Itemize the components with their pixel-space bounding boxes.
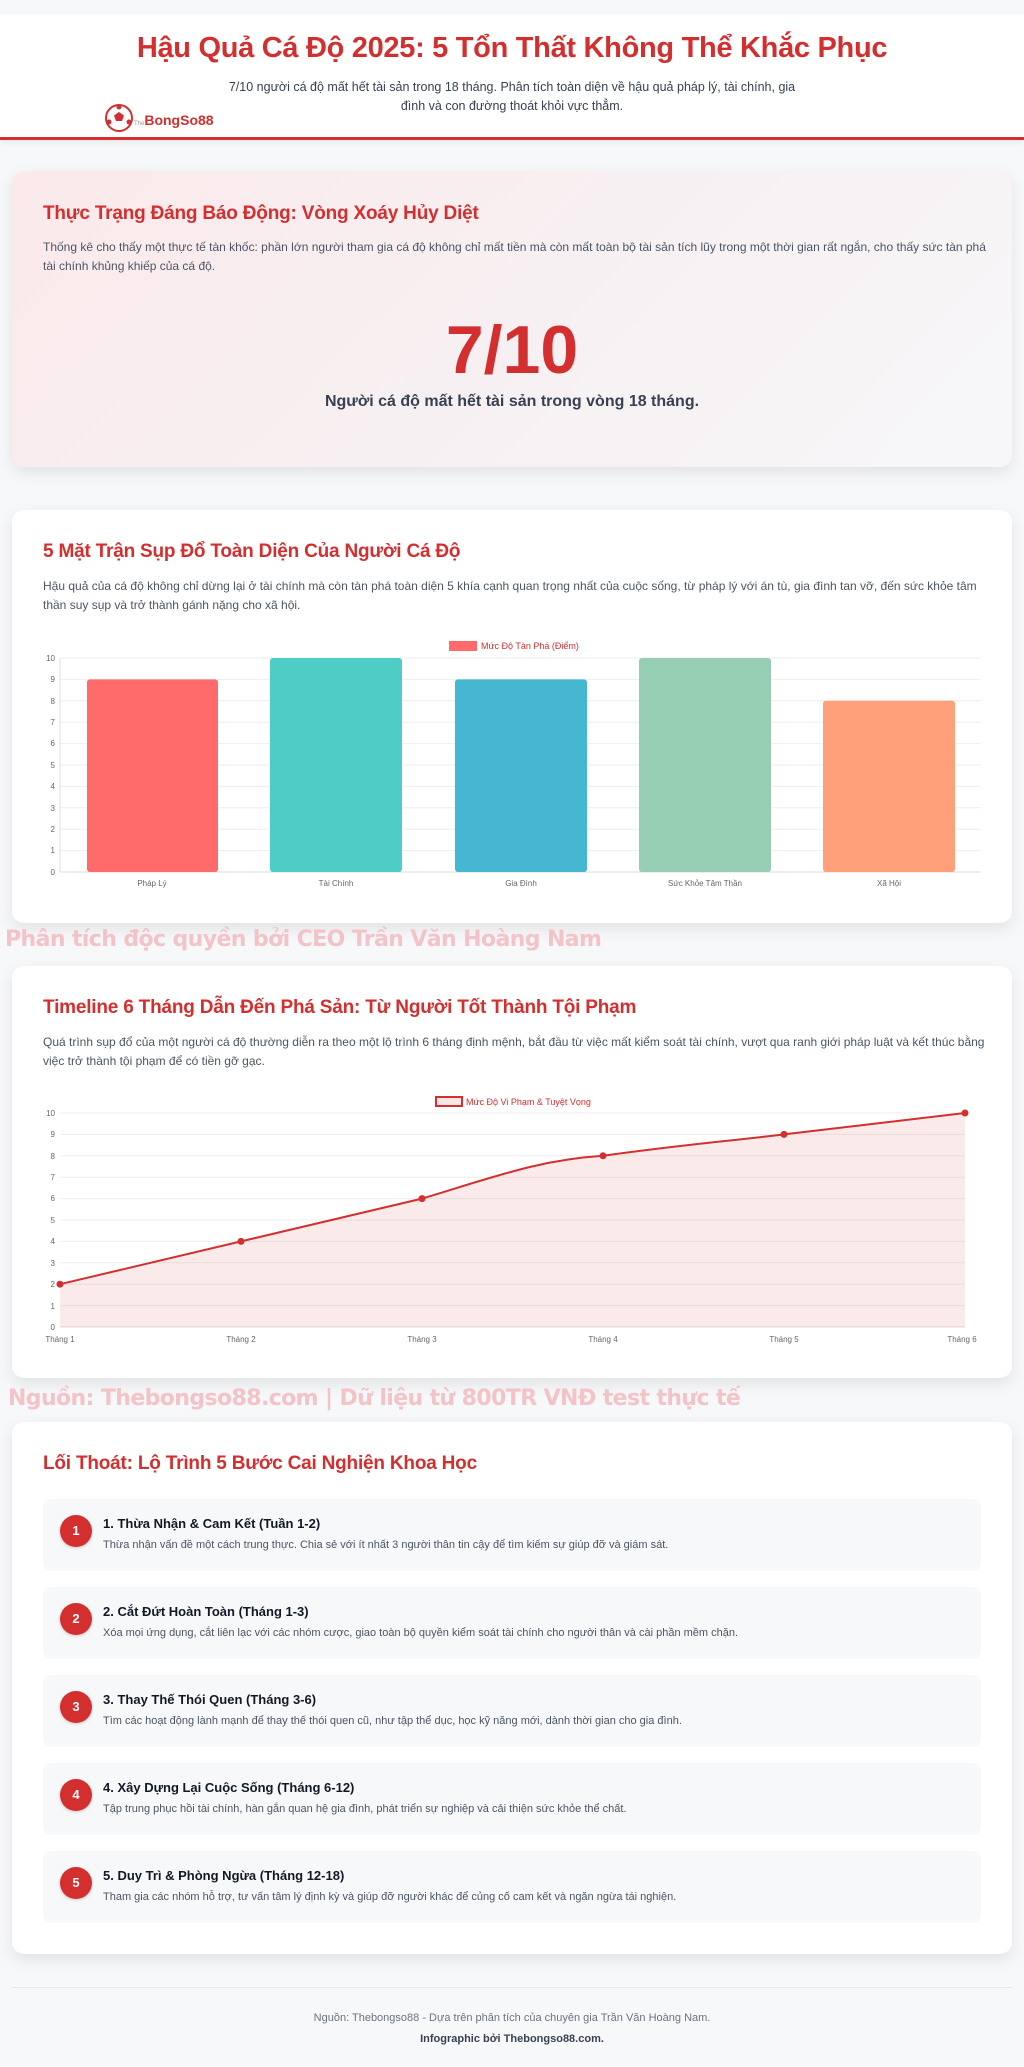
step 4 bbox=[43, 1763, 981, 1835]
stat caption: Người cá độ mất hết tài sản trong vòng 18 tháng. bbox=[325, 393, 699, 410]
heading: Lối Thoát: Lộ Trình 5 Bước Cai Nghiện Khoa Học bbox=[43, 1453, 477, 1474]
line chart bbox=[45, 1096, 977, 1344]
line chart: 2 bbox=[51, 1280, 56, 1289]
bar chart: 3 bbox=[51, 804, 56, 813]
line chart: 6 bbox=[51, 1194, 56, 1203]
step 3: 3 bbox=[72, 1699, 80, 1714]
heading: Timeline 6 Tháng Dẫn Đến Phá Sản: Từ Người Tốt Thành Tội Phạm bbox=[43, 997, 636, 1018]
bar chart: 7 bbox=[51, 718, 56, 727]
step 4: Tập trung phục hồi tài chính, hàn gắn quan hệ gia đình, phát triển sự nghiệp và cải thiện sức khỏe thể chất. bbox=[103, 1803, 627, 1815]
bar chart: 10 bbox=[46, 654, 56, 663]
footer: Nguồn: Thebongso88 - Dựa trên phân tích của chuyên gia Trần Văn Hoàng Nam. bbox=[314, 2012, 710, 2024]
line chart: 5 bbox=[51, 1216, 56, 1225]
line chart: Tháng 3 bbox=[407, 1335, 437, 1344]
footer: Infographic bởi Thebongso88.com. bbox=[420, 2033, 604, 2045]
step 4: 4 bbox=[72, 1787, 80, 1802]
bars bbox=[87, 658, 955, 872]
step 1 bbox=[43, 1499, 981, 1571]
logo bbox=[105, 104, 214, 132]
line chart: Tháng 4 bbox=[588, 1335, 618, 1344]
step 1: 1. Thừa Nhận & Cam Kết (Tuần 1-2) bbox=[103, 1516, 320, 1531]
bar chart: 1 bbox=[51, 846, 56, 855]
panel: timeline bbox=[12, 966, 1012, 1378]
bar chart: Tài Chính bbox=[319, 879, 353, 888]
step 4: 4. Xây Dựng Lại Cuộc Sống (Tháng 6-12) bbox=[103, 1780, 354, 1795]
paragraph: Quá trình sụp đổ của một người cá độ thường diễn ra theo một lộ trình 6 tháng định mệnh, bắt đầu từ việc mất kiểm soát tài chính, vượt qua ranh giới pháp luật và kết thúc bằng việc trở thành tội phạm để có tiền gỡ gạc. bbox=[43, 1035, 984, 1068]
bar chart: Xã Hội bbox=[877, 879, 901, 888]
line chart: Tháng 5 bbox=[769, 1335, 799, 1344]
step 2: 2. Cắt Đứt Hoàn Toàn (Tháng 1-3) bbox=[103, 1604, 309, 1619]
line chart: 10 bbox=[46, 1109, 56, 1118]
line chart: 7 bbox=[51, 1173, 56, 1182]
bar chart: 6 bbox=[51, 739, 56, 748]
paragraph: Hậu quả của cá độ không chỉ dừng lại ở tài chính mà còn tàn phá toàn diện 5 khía cạnh quan trọng nhất của cuộc sống, từ pháp lý với án tù, gia đình tan vỡ, đến sức khỏe tâm thần suy sụp và trở thành gánh nặng cho xã hội. bbox=[43, 579, 977, 612]
step 3 bbox=[43, 1675, 981, 1747]
line chart: 9 bbox=[51, 1130, 56, 1139]
panel: 5 fronts bbox=[12, 510, 1012, 923]
bar chart: 0 bbox=[51, 868, 56, 877]
line chart: Tháng 2 bbox=[226, 1335, 256, 1344]
bar chart: 5 bbox=[51, 761, 56, 770]
logo: TheBongSo88 bbox=[134, 112, 214, 128]
bar chart: Pháp Lý bbox=[137, 879, 167, 888]
paragraph: Thống kê cho thấy một thực tế tàn khốc: phần lớn người tham gia cá độ không chỉ mất tiền mà còn mất toàn bộ tài sản tích lũy trong một thời gian rất ngắn, cho thấy sức tàn phá tài chính khủng khiếp của cá độ. bbox=[43, 240, 986, 273]
step 2 bbox=[43, 1587, 981, 1659]
step 3: Tìm các hoạt động lành mạnh để thay thế thói quen cũ, như tập thể dục, học kỹ năng mới, dành thời gian cho gia đình. bbox=[103, 1715, 682, 1727]
line chart: 1 bbox=[51, 1302, 56, 1311]
panel: alarming reality bbox=[12, 171, 1012, 467]
bar chart: 9 bbox=[51, 675, 56, 684]
step 5: 5 bbox=[72, 1875, 80, 1890]
bar chart: 8 bbox=[51, 697, 56, 706]
step 5 bbox=[43, 1851, 981, 1923]
title: Hậu Quả Cá Độ 2025: 5 Tổn Thất Không Thể Khắc Phục bbox=[137, 32, 887, 64]
heading: 5 Mặt Trận Sụp Đổ Toàn Diện Của Người Cá Độ bbox=[43, 541, 460, 562]
bar chart bbox=[46, 641, 981, 888]
watermark: CEO: Phân tích độc quyền bởi CEO Trần Văn Hoàng Nam bbox=[5, 927, 601, 952]
step 5: 5. Duy Trì & Phòng Ngừa (Tháng 12-18) bbox=[103, 1868, 344, 1883]
step 1: 1 bbox=[72, 1523, 80, 1538]
step 2: Xóa mọi ứng dụng, cắt liên lạc với các nhóm cược, giao toàn bộ quyền kiểm soát tài chính cho người thân và cài phần mềm chặn. bbox=[103, 1627, 738, 1639]
line chart: 3 bbox=[51, 1259, 56, 1268]
watermark: source: Nguồn: Thebongso88.com | Dữ liệu từ 800TR VNĐ test thực tế bbox=[8, 1386, 740, 1411]
heading: Thực Trạng Đáng Báo Động: Vòng Xoáy Hủy Diệt bbox=[43, 203, 479, 224]
panel: recovery steps bbox=[12, 1422, 1012, 1954]
line chart: 4 bbox=[51, 1237, 56, 1246]
bar chart: Sức Khỏe Tâm Thần bbox=[668, 879, 742, 888]
big stat: 7/10 bbox=[446, 312, 578, 388]
line chart: 8 bbox=[51, 1152, 56, 1161]
bar chart: 2 bbox=[51, 825, 56, 834]
line chart: Tháng 1 bbox=[45, 1335, 75, 1344]
legend: Mức Độ Vi Phạm & Tuyệt Vọng bbox=[466, 1097, 591, 1107]
step 2: 2 bbox=[72, 1611, 80, 1626]
step 5: Tham gia các nhóm hỗ trợ, tư vấn tâm lý định kỳ và giúp đỡ người khác để củng cố cam kết và ngăn ngừa tái nghiện. bbox=[103, 1891, 676, 1903]
line series bbox=[56, 1110, 968, 1327]
legend: Mức Độ Tàn Phá (Điểm) bbox=[481, 641, 579, 651]
subtitle: 7/10 người cá độ mất hết tài sản trong 18 tháng. Phân tích toàn diện về hậu quả pháp lý, tài chính, gia đình và con đường thoát khỏi vực thẳm. bbox=[229, 80, 795, 113]
bar chart: 4 bbox=[51, 782, 56, 791]
step 3: 3. Thay Thế Thói Quen (Tháng 3-6) bbox=[103, 1692, 316, 1707]
bar chart: Gia Đình bbox=[505, 879, 537, 888]
line chart: 0 bbox=[51, 1323, 56, 1332]
step 1: Thừa nhận vấn đề một cách trung thực. Chia sẻ với ít nhất 3 người thân tin cậy để tìm kiếm sự giúp đỡ và giám sát. bbox=[103, 1539, 668, 1551]
footer bbox=[314, 2012, 710, 2045]
header bbox=[0, 14, 1024, 140]
line chart: Tháng 6 bbox=[947, 1335, 977, 1344]
